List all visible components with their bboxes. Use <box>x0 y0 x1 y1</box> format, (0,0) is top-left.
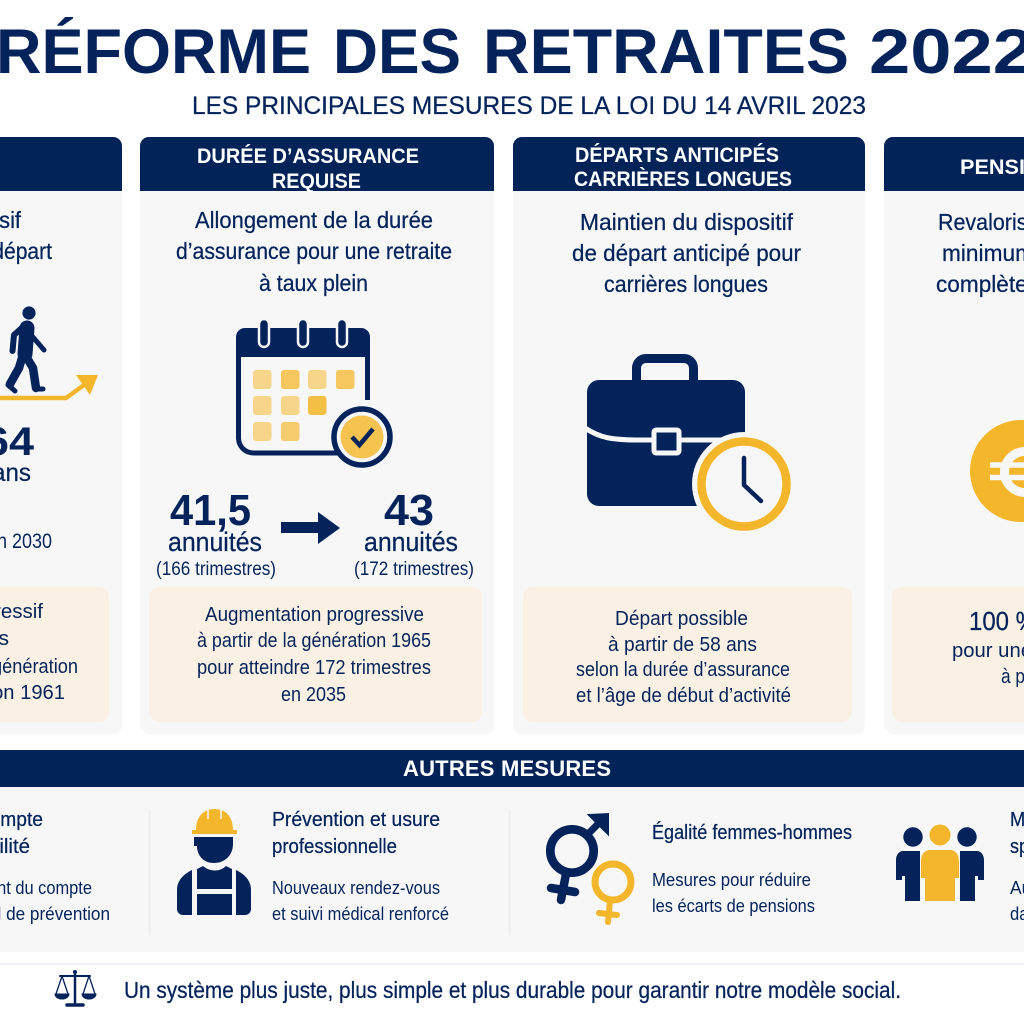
icon: calendar with check badge <box>236 319 390 465</box>
stat: 64 ans <box>0 420 52 553</box>
measure: égalité femmes-hommes: Mesures pour réduire <box>652 869 811 890</box>
measure: compte pénibilité <box>0 809 110 924</box>
measure: prévention et usure professionnelle: Nouveaux rendez-vous <box>272 877 440 898</box>
stat: 43 annuités: (172 trimestres) <box>354 559 474 580</box>
stat: 41,5 annuités: (166 trimestres) <box>156 559 276 580</box>
card heading: REQUISE <box>272 170 361 193</box>
panel: autres mesures <box>0 750 1024 952</box>
title: RÉFORME <box>0 17 311 87</box>
title <box>0 17 1024 87</box>
title: 2022 <box>869 17 1024 87</box>
card text: description: Maintien du dispositif <box>580 209 794 235</box>
icon: group of people <box>896 824 984 901</box>
stat: 43 annuités: annuités <box>364 527 458 557</box>
callout: augmentation progressive <box>149 587 482 722</box>
subtitle: LES PRINCIPALES MESURES DE LA LOI DU 14 AVRIL 2023 <box>192 92 866 120</box>
icon: briefcase with clock <box>585 358 796 536</box>
callout: augmentation progressive: à partir de la génération 1965 <box>197 630 431 652</box>
stat: 43 annuités: 43 <box>384 486 434 535</box>
measure: mesures spécifiques <box>1010 809 1024 924</box>
card text: description <box>0 207 53 264</box>
callout: départ possible: selon la durée d’assurance <box>576 659 790 681</box>
heading: autres mesures: AUTRES MESURES <box>403 756 611 781</box>
card heading: DURÉE D’ASSURANCE <box>197 145 419 168</box>
icon: euro coin <box>970 420 1024 522</box>
icon: scales of justice <box>55 970 96 1005</box>
title: RETRAITES <box>483 17 849 87</box>
card text: description <box>176 207 452 296</box>
card text: description: à taux plein <box>259 270 368 296</box>
card text: description: de départ anticipé pour <box>572 240 801 266</box>
callout: augmentation progressive: Augmentation progressive <box>205 604 424 626</box>
measure: prévention et usure professionnelle: professionnelle <box>272 836 397 858</box>
icon: worker with helmet <box>177 809 251 915</box>
stat: 41,5 annuités <box>156 486 276 580</box>
callout: départ possible: à partir de 58 ans <box>608 634 757 656</box>
card heading <box>574 144 792 191</box>
card heading: CARRIÈRES LONGUES <box>574 168 792 191</box>
card text: description: carrières longues <box>604 271 768 297</box>
title: DES <box>333 17 461 87</box>
measure: prévention et usure professionnelle: Prévention et usure <box>272 809 440 831</box>
panel: départs anticipés carrières longues <box>513 137 865 734</box>
card heading: DÉPARTS ANTICIPÉS <box>575 144 779 167</box>
callout: départ possible: Départ possible <box>615 608 748 630</box>
measure: prévention et usure professionnelle: et suivi médical renforcé <box>272 903 449 924</box>
card text: description: d’assurance pour une retraite <box>176 238 452 264</box>
footer tagline: Un système plus juste, plus simple et plus durable pour garantir notre modèle social. <box>124 977 901 1003</box>
measure: égalité femmes-hommes: les écarts de pensions <box>652 895 815 916</box>
stat: 41,5 annuités: annuités <box>168 527 262 557</box>
panel: âge légal de départ <box>0 137 122 734</box>
callout: départ possible: et l’âge de début d’activité <box>576 685 791 707</box>
panel: durée d'assurance requise <box>140 137 494 734</box>
icon: gender symbols <box>550 814 631 922</box>
card text: description <box>572 209 801 297</box>
callout: calendrier progressif <box>0 587 109 722</box>
callout: augmentation progressive: pour atteindre 172 trimestres <box>197 657 431 679</box>
callout: augmentation progressive: en 2035 <box>281 684 346 706</box>
card heading <box>197 145 419 193</box>
icon: walking person on rising arrow <box>0 306 98 398</box>
panel: pensions <box>884 137 1024 734</box>
stat: 41,5 annuités: 41,5 <box>170 486 251 535</box>
measure: prévention et usure professionnelle <box>272 809 449 924</box>
card text: description: Allongement de la durée <box>195 207 433 233</box>
callout: 100 % <box>892 587 1024 722</box>
card text: description <box>936 209 1024 297</box>
arrow <box>281 512 340 544</box>
callout: départ possible <box>523 587 852 722</box>
stat: 43 annuités <box>354 486 474 580</box>
measure: égalité femmes-hommes: Égalité femmes-hommes <box>652 821 852 844</box>
measure: égalité femmes-hommes <box>652 821 852 916</box>
